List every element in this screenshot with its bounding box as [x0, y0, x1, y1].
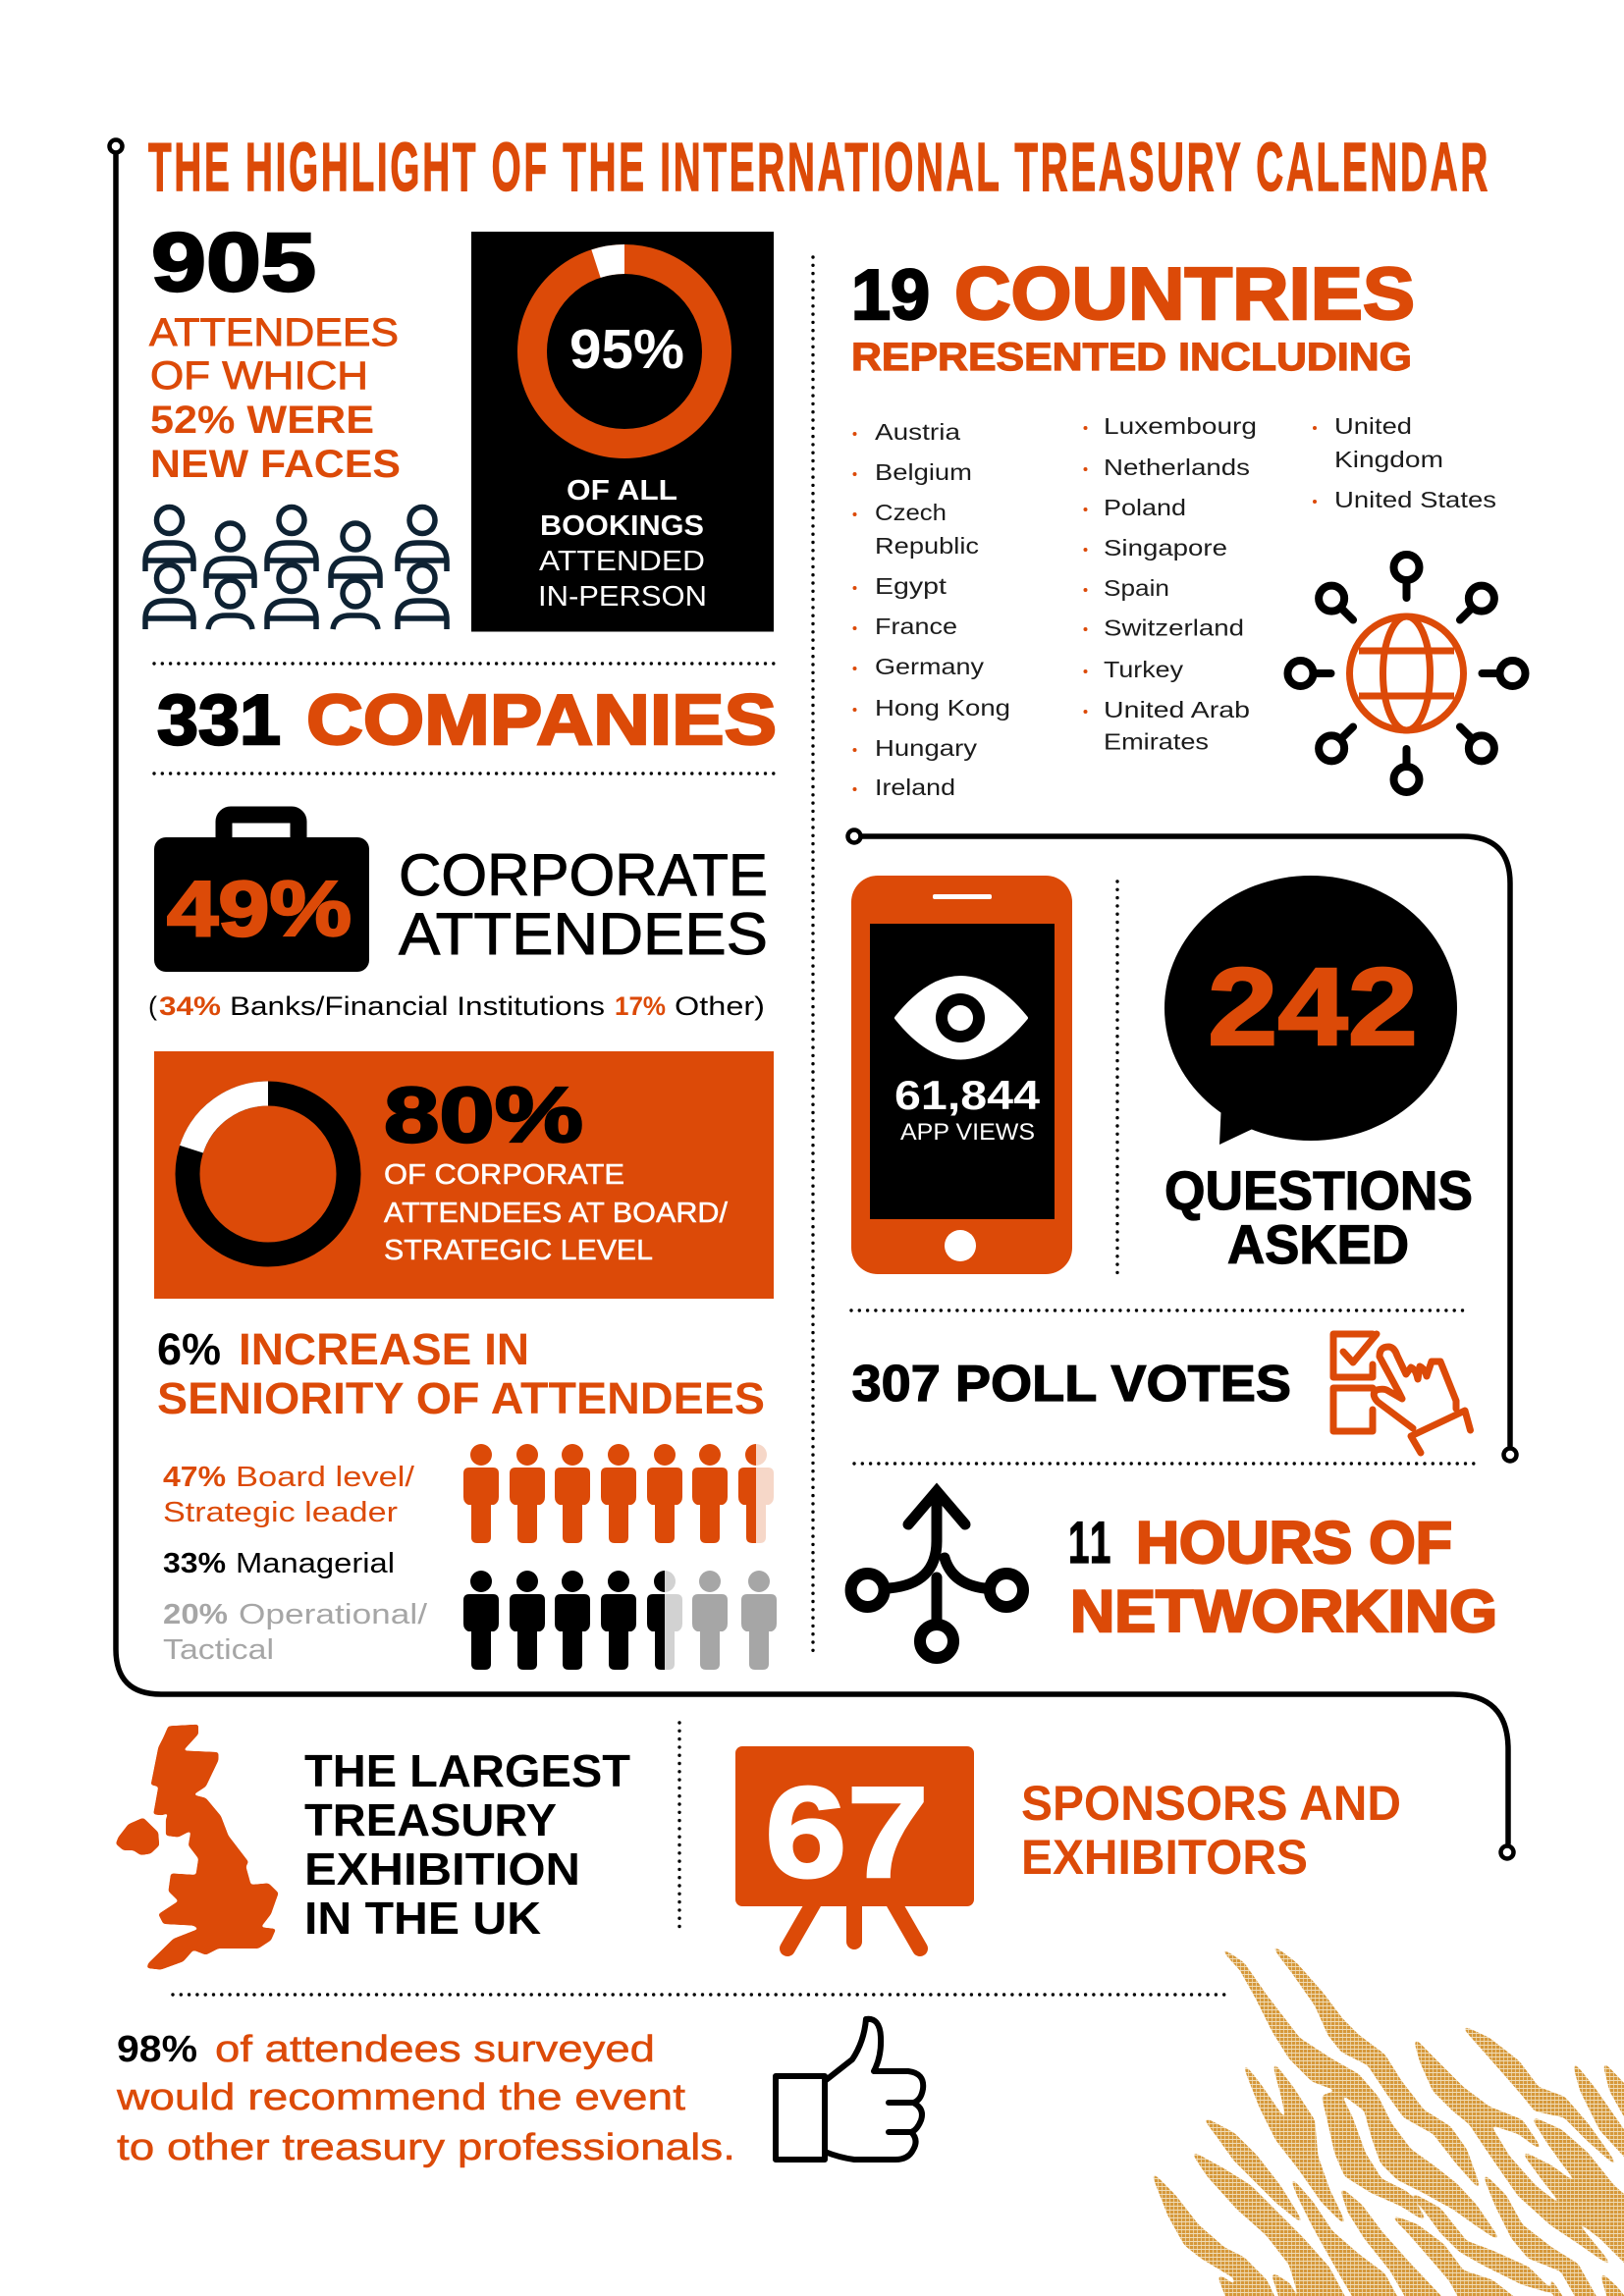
- attendees description: [149, 311, 401, 486]
- country list: column 2: Netherlands: [1104, 454, 1250, 480]
- largest exhibition label: IN THE UK: [304, 1893, 541, 1944]
- icon: eye: [896, 978, 1026, 1058]
- seniority legend: Strategic leader: [163, 1497, 398, 1528]
- attendees description: NEW FACES: [150, 443, 401, 486]
- seniority legend: 33%: [163, 1548, 226, 1579]
- icon: group of people: [145, 507, 447, 629]
- icon: networking arrows: [851, 1491, 1023, 1658]
- tiger stripe pattern: [1153, 1948, 1624, 2296]
- sponsors label: EXHIBITORS: [1021, 1830, 1308, 1885]
- country list: column 1: [852, 419, 1010, 800]
- country list: column 1: Hungary: [875, 735, 978, 761]
- countries heading: [851, 252, 1415, 379]
- icon: display board with sponsor count: 67: [765, 1760, 929, 1904]
- seniority legend: Operational/: [239, 1599, 428, 1630]
- country list: column 2: Emirates: [1104, 728, 1209, 754]
- app views value: 61,844: [894, 1072, 1041, 1118]
- attendee count: 905: [151, 216, 316, 308]
- country list: column 2: Turkey: [1104, 657, 1184, 682]
- pictogram: managerial and operational row: [463, 1571, 777, 1670]
- poll votes label: 307 POLL VOTES: [852, 1356, 1291, 1413]
- sponsors label: SPONSORS AND: [1021, 1776, 1401, 1831]
- attendees description: ATTENDEES: [149, 311, 399, 354]
- largest exhibition label: TREASURY: [304, 1794, 557, 1845]
- companies heading: [157, 681, 777, 760]
- bookings caption: IN-PERSON: [538, 581, 707, 613]
- country list: column 3: United States: [1334, 487, 1496, 512]
- attendees description: OF WHICH: [150, 354, 368, 398]
- networking hours heading: HOURS OF: [1136, 1510, 1452, 1575]
- app views label: APP VIEWS: [900, 1119, 1035, 1146]
- icon: briefcase with 49%: 49%: [167, 865, 352, 952]
- donut chart: 80%: [188, 1094, 349, 1255]
- networking hours heading: NETWORKING: [1070, 1578, 1497, 1644]
- recommendation statement: 98%: [117, 2029, 197, 2070]
- panel: in-person bookings: [471, 232, 774, 632]
- country list: column 1: Republic: [875, 533, 979, 559]
- countries heading: REPRESENTED INCLUDING: [851, 336, 1412, 379]
- country list: column 1: Czech: [875, 500, 947, 525]
- country list: column 1: Germany: [875, 654, 985, 679]
- country list: column 3: United: [1334, 413, 1412, 439]
- country list: column 2: Singapore: [1104, 535, 1227, 561]
- recommendation statement: would recommend the event: [116, 2077, 686, 2118]
- bookings caption: OF ALL: [567, 475, 677, 507]
- bookings caption: ATTENDED: [539, 546, 705, 577]
- icon: globe network: [1288, 555, 1526, 792]
- breakdown note: 17%: [615, 991, 666, 1021]
- corporate attendees label: CORPORATE: [399, 842, 768, 908]
- icon: briefcase with 49%: [154, 815, 369, 972]
- country list: column 2: Poland: [1104, 495, 1186, 520]
- recommendation statement: of attendees surveyed: [215, 2029, 655, 2070]
- companies heading: 331: [157, 681, 281, 760]
- country list: column 2: Luxembourg: [1104, 413, 1257, 439]
- seniority heading: INCREASE IN: [239, 1324, 529, 1374]
- seniority legend: 47%: [163, 1462, 226, 1493]
- seniority legend: Managerial: [236, 1548, 395, 1579]
- donut chart: 95%: [532, 259, 717, 444]
- companies heading: COMPANIES: [306, 681, 777, 760]
- breakdown note: (: [148, 991, 157, 1021]
- panel caption: ATTENDEES AT BOARD/: [384, 1198, 729, 1229]
- largest exhibition label: THE LARGEST: [304, 1745, 630, 1796]
- country list: column 2: Switzerland: [1104, 614, 1244, 640]
- sponsors label: [1021, 1776, 1401, 1885]
- seniority legend: 20%: [163, 1599, 228, 1630]
- country list: column 1: Austria: [875, 419, 960, 445]
- country list: column 3: Kingdom: [1334, 447, 1443, 472]
- corporate attendees label: ATTENDEES: [399, 901, 768, 967]
- country list: column 1: Egypt: [875, 573, 947, 599]
- country list: column 1: Belgium: [875, 459, 972, 485]
- countries heading: COUNTRIES: [954, 252, 1415, 335]
- panel: board level attendees: [154, 1051, 774, 1299]
- icon: phone with app views: [851, 876, 1072, 1274]
- seniority legend: Board level/: [236, 1462, 415, 1493]
- country list: column 1: Hong Kong: [875, 695, 1010, 721]
- country list: column 2: [1084, 413, 1257, 754]
- breakdown note: 34%: [159, 991, 221, 1021]
- icon: hand ticking checklist: [1333, 1334, 1471, 1453]
- icon: speech bubble with questions count: [1164, 876, 1457, 1145]
- largest exhibition label: [304, 1745, 630, 1944]
- largest exhibition label: EXHIBITION: [304, 1843, 580, 1895]
- recommendation statement: to other treasury professionals.: [117, 2127, 735, 2168]
- breakdown note: Banks/Financial Institutions: [230, 991, 605, 1021]
- seniority legend: Tactical: [163, 1634, 274, 1666]
- networking hours heading: [1068, 1510, 1497, 1644]
- breakdown note: [148, 991, 765, 1021]
- panel caption: [384, 1159, 729, 1266]
- seniority heading: SENIORITY OF ATTENDEES: [157, 1373, 765, 1423]
- seniority heading: [157, 1324, 765, 1423]
- right column timeline connector: [848, 830, 1516, 1461]
- country list: column 2: United Arab: [1104, 697, 1250, 722]
- country list: column 2: Spain: [1104, 575, 1169, 601]
- pictogram: board level row: [463, 1444, 774, 1543]
- seniority heading: 6%: [157, 1324, 221, 1374]
- icon: display board with sponsor count: [735, 1746, 974, 1949]
- country list: column 1: Ireland: [875, 774, 955, 800]
- networking hours heading: 11: [1068, 1510, 1113, 1575]
- panel caption: STRATEGIC LEVEL: [384, 1235, 653, 1266]
- bookings caption: [538, 475, 707, 613]
- breakdown note: Other): [675, 991, 765, 1021]
- panel caption: OF CORPORATE: [384, 1159, 624, 1191]
- country list: column 3: [1313, 413, 1496, 512]
- recommendation statement: [116, 2029, 735, 2168]
- questions asked label: ASKED: [1227, 1213, 1409, 1275]
- country list: column 1: France: [875, 614, 957, 639]
- bookings caption: BOOKINGS: [540, 510, 704, 542]
- corporate attendees label: [399, 842, 768, 967]
- icon: speech bubble with questions count: 242: [1208, 945, 1418, 1068]
- seniority legend: [163, 1462, 428, 1666]
- countries heading: 19: [851, 256, 930, 335]
- questions asked label: [1164, 1159, 1473, 1275]
- questions asked label: QUESTIONS: [1164, 1159, 1473, 1221]
- panel value: 80%: [384, 1071, 583, 1158]
- attendees description: 52% WERE: [150, 399, 374, 442]
- main timeline connector: [110, 139, 1514, 1859]
- icon: UK map: [116, 1725, 279, 1970]
- donut value: 95%: [569, 318, 684, 381]
- icon: thumbs up: [776, 2019, 923, 2160]
